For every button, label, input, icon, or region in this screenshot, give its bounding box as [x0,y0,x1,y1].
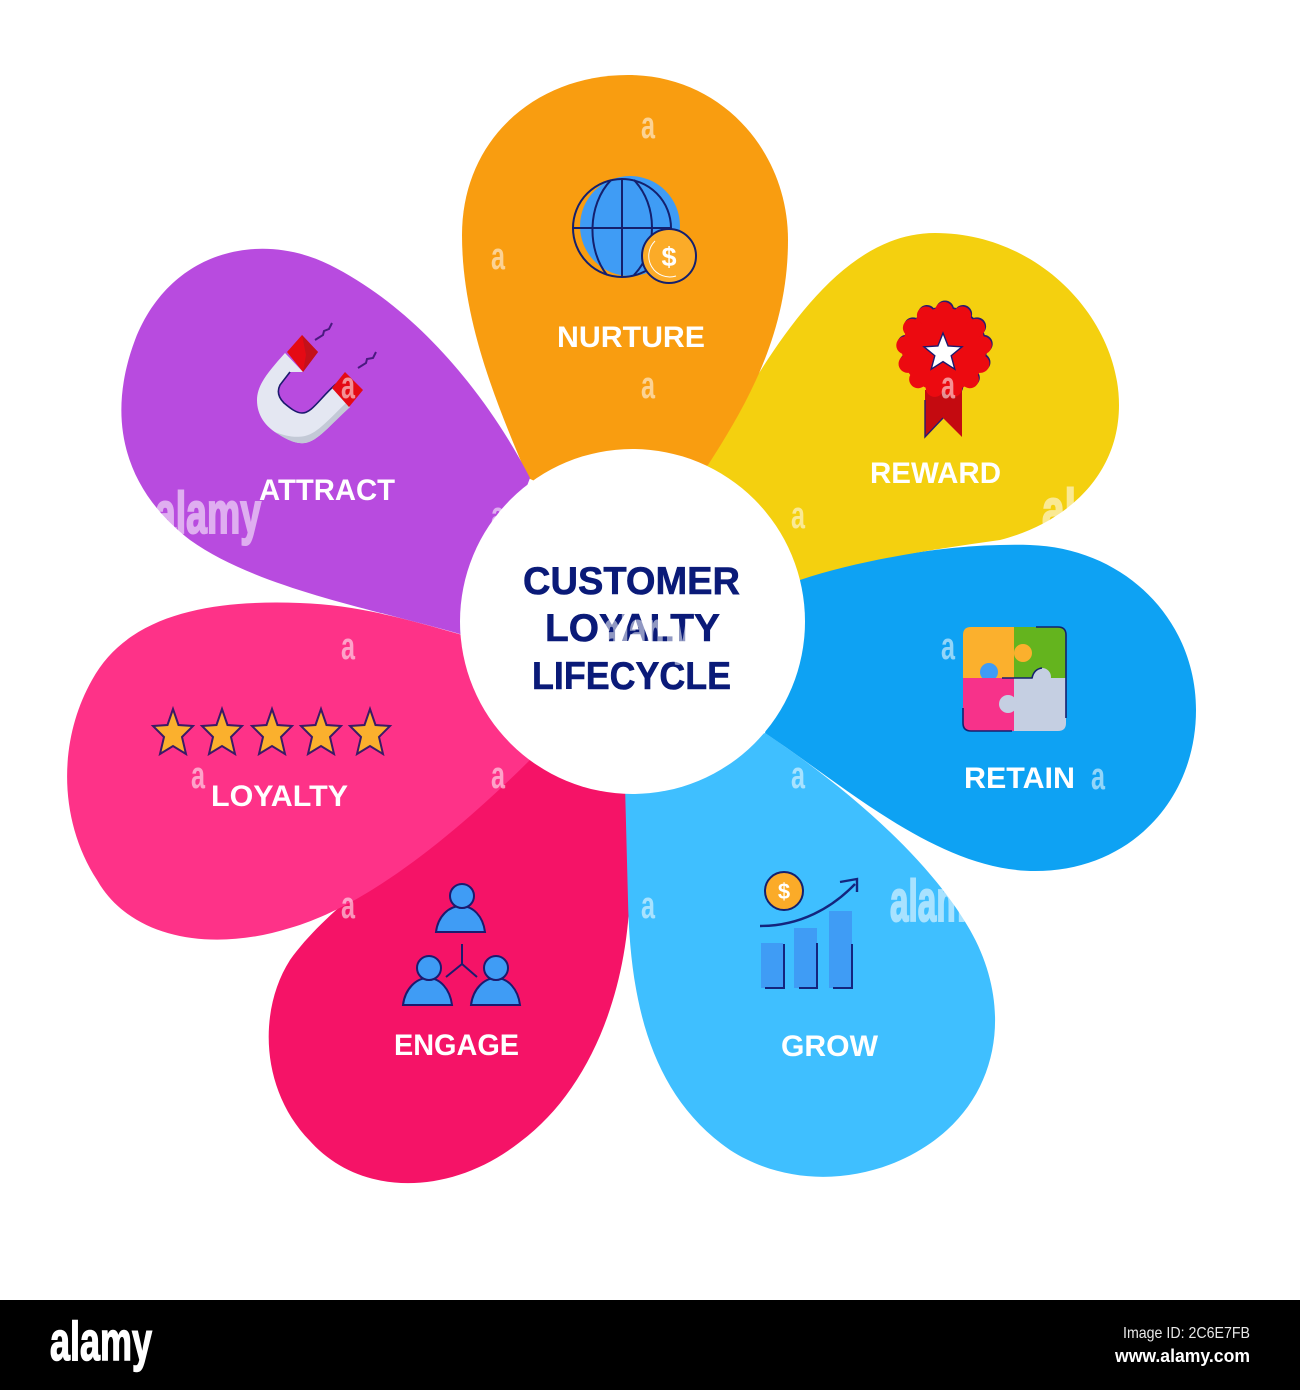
label: grow: GROW [781,1030,879,1063]
title: LOYALTY [545,607,720,650]
watermarks: a [791,495,806,537]
watermarks: a [791,755,806,797]
panel: reward petal [705,233,1119,580]
title: LIFECYCLE [532,655,731,698]
title: CUSTOMER [523,560,740,603]
watermarks: a [191,755,206,797]
icon: globe with coin [573,176,696,283]
icon: puzzle [963,627,1066,731]
watermarks: a [641,885,656,927]
watermarks: a [941,365,956,407]
panel: loyalty petal [67,603,535,940]
icon: award rosette [895,300,994,437]
watermarks: a [641,365,656,407]
icon: growth chart with coin: $ [778,879,790,904]
watermarks: a [941,626,956,668]
panel: engage petal [269,755,630,1183]
watermarks: alamy [603,600,691,665]
watermarks: alamy [155,481,261,546]
panel: retain petal [765,545,1196,871]
watermarks: a [491,755,506,797]
watermarks [155,105,1106,934]
watermarks: alam [890,869,966,934]
panel: attract petal [121,249,530,637]
center circle [460,449,805,794]
footer bar [0,1300,1300,1390]
watermarks: a [341,626,356,668]
website: www.alamy.com [1114,1346,1250,1366]
icon: growth chart with coin [760,872,857,988]
watermarks: a [491,495,506,537]
label: loyalty: LOYALTY [211,780,348,813]
watermarks: a [491,236,506,278]
icon: people network [403,884,520,1005]
watermarks: al [1042,478,1076,543]
icon: globe with coin: $ [661,242,677,272]
label: retain: RETAIN [964,762,1075,795]
title [523,560,740,698]
footer logo: alamy [50,1310,152,1372]
label: attract: ATTRACT [259,474,395,507]
panel: grow petal [625,733,995,1177]
label: reward: REWARD [870,457,1001,490]
panel: nurture petal [462,75,788,520]
icon: magnet [257,323,376,443]
watermarks: a [641,105,656,147]
label: nurture: NURTURE [557,321,705,354]
icon: five stars [153,709,390,754]
watermarks: a [1091,756,1106,798]
watermarks: a [341,885,356,927]
image id: Image ID: 2C6E7FB [1123,1325,1250,1342]
watermarks: a [341,365,356,407]
label: engage: ENGAGE [394,1029,519,1062]
